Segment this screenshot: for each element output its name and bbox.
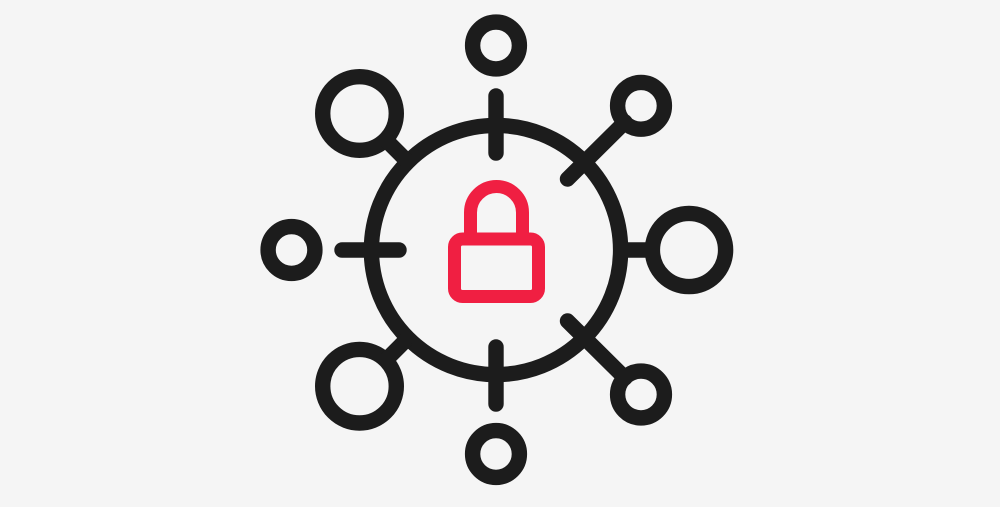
padlock body — [454, 239, 538, 296]
node: bottom right — [568, 321, 664, 418]
icon: red padlock — [454, 187, 538, 296]
node: top — [473, 22, 519, 153]
node: bottom left — [323, 339, 407, 423]
node: bottom — [473, 347, 519, 477]
node: top right — [568, 82, 664, 179]
node: left — [268, 227, 399, 273]
node: right — [626, 213, 726, 287]
padlock shackle — [470, 187, 522, 238]
node: top left — [323, 77, 407, 161]
central ring — [371, 125, 621, 375]
